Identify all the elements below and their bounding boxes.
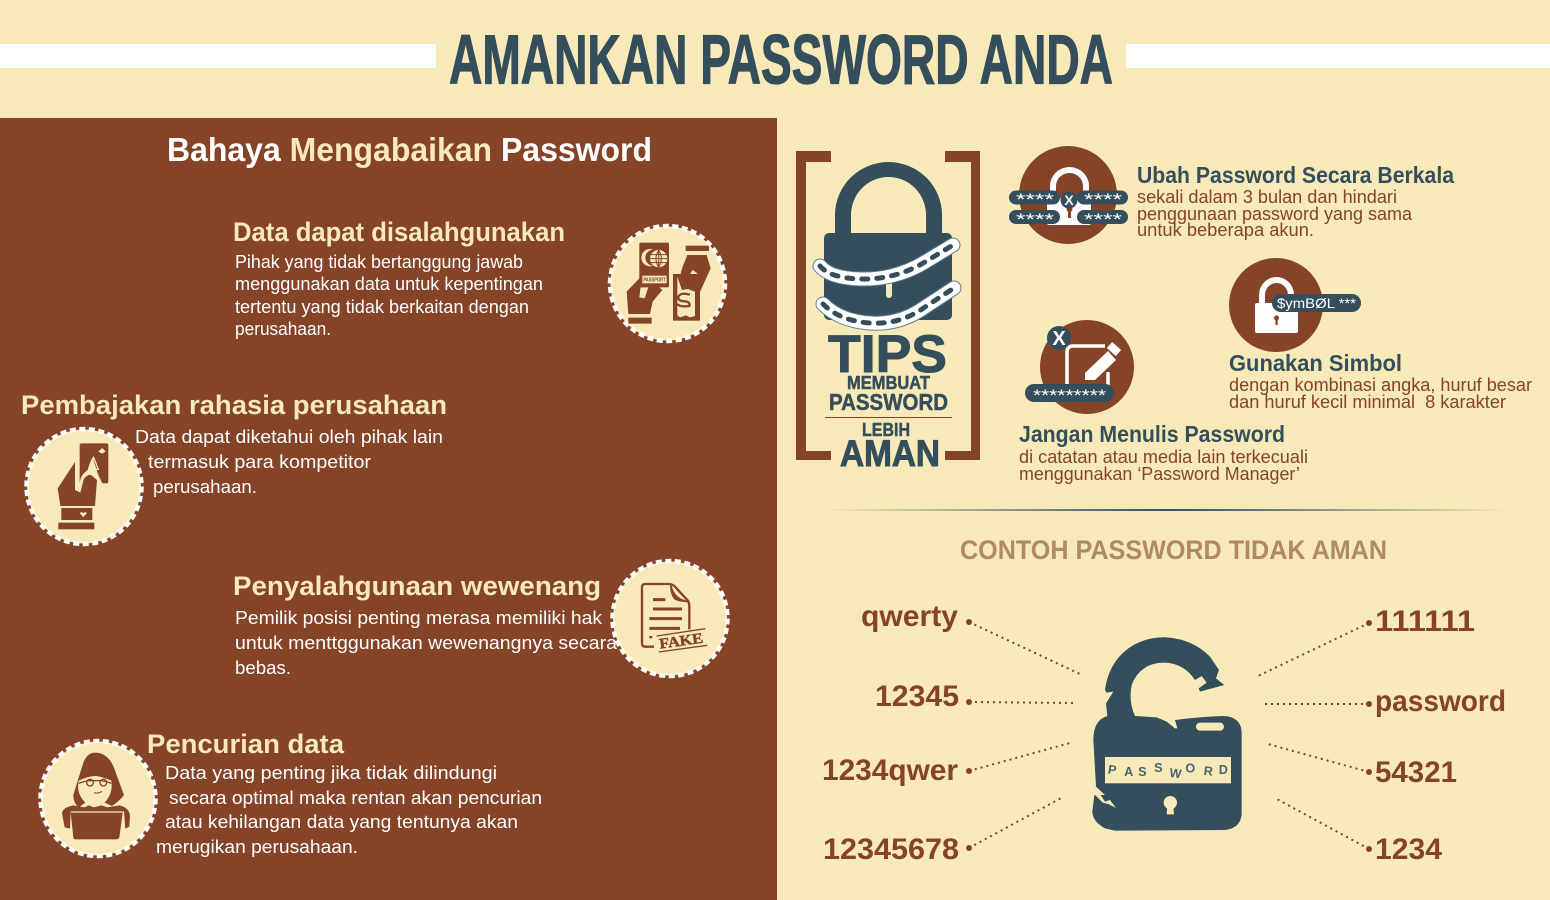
title banner: AMANKAN PASSWORD ANDA [449,20,1113,98]
item: pencurian data: Pencurian data [147,729,344,759]
icon: broken padlock: S [1138,765,1147,779]
icon: broken padlock: D [1219,763,1228,777]
title banner [0,20,1550,98]
label: 1234qwer: 1234qwer [822,754,958,787]
tip: ubah password: untuk beberapa akun. [1137,219,1314,240]
label: 1234 [1275,798,1442,866]
icon: broken padlock [1092,637,1242,831]
tip: gunakan simbol [1229,258,1532,412]
tips heading: AMAN [840,432,940,474]
item: data dapat disalahgunakan: menggunakan data untuk kepentingan [235,273,543,294]
item: penyalahgunaan wewenang: Pemilik posisi penting merasa memiliki hak [235,607,603,628]
icon: broken padlock: A [1124,765,1133,779]
icon: exchanging passport for money [610,226,725,341]
icon: lock with password fields: **** [1084,210,1123,229]
item: pencurian data: atau kehilangan data yang tentunya akan [165,811,518,832]
item: pencurian data [147,729,542,857]
label: 111111 [1258,605,1475,676]
item: data dapat disalahgunakan: perusahaan. [235,318,331,339]
tips heading: PASSWORD [829,389,948,415]
item: data dapat disalahgunakan: Pihak yang tidak bertanggung jawab [235,251,523,272]
label: 12345678 [823,797,1063,866]
tip: ubah password: sekali dalam 3 bulan dan hindari [1137,186,1397,207]
label: 1234qwer [822,743,1070,787]
icon: note and pencil crossed: X [1052,328,1066,350]
tips heading: TIPS [828,325,947,384]
label: 12345678: 12345678 [823,833,959,866]
panel: bahaya mengabaikan password [0,118,777,900]
item: pembajakan rahasia perusahaan: Pembajakan rahasia perusahaan [21,390,447,420]
tips heading: MEMBUAT [847,372,931,393]
tips heading: LEBIH [862,420,910,440]
item: pembajakan rahasia perusahaan: Data dapat diketahui oleh pihak lain [135,426,443,447]
icon: open lock with symbol password: $ymBØL *** [1277,295,1357,311]
icon: chained padlock [820,162,954,323]
icon: hooded hacker with laptop [40,741,156,856]
icon: lock with password fields: **** [1016,190,1055,209]
tip: gunakan simbol: dengan kombinasi angka, huruf besar [1229,374,1532,395]
panel heading: Bahaya Mengabaikan Password [167,131,652,168]
tip: gunakan simbol: Gunakan Simbol [1229,350,1402,376]
brackets [796,151,980,460]
icon: open lock with symbol password [1229,258,1361,352]
item: pencurian data: merugikan perusahaan. [156,836,358,857]
item: pembajakan rahasia perusahaan [21,390,447,497]
label: 54321 [1268,744,1457,789]
item: penyalahgunaan wewenang: bebas. [235,657,291,678]
tip: jangan menulis password: Jangan Menulis Password [1019,421,1285,447]
icon: fake document [612,561,728,676]
icon: fake document: FAKE [658,631,704,653]
tip: jangan menulis password [1019,320,1308,484]
icon: note and pencil crossed: ********* [1033,386,1106,405]
item: pembajakan rahasia perusahaan: termasuk para kompetitor [148,451,371,472]
label: 111111: 111111 [1375,605,1475,638]
icon: broken padlock: O [1185,762,1195,776]
tip: jangan menulis password: menggunakan ‘Password Manager’ [1019,463,1300,484]
icon: hand holding card [26,429,142,544]
item: penyalahgunaan wewenang: untuk menttggunakan wewenangnya secara [235,632,618,653]
label: password: password [1375,685,1506,718]
icon: broken padlock: S [1154,761,1163,775]
item: pencurian data: secara optimal maka rentan akan pencurian [169,787,542,808]
heading: contoh password tidak aman: CONTOH PASSWORD TIDAK AMAN [960,535,1387,565]
tip: ubah password [1009,146,1454,244]
item: data dapat disalahgunakan: tertentu yang tidak berkaitan dengan [235,296,529,317]
icon: broken padlock: P [1107,763,1118,778]
item: pencurian data: Data yang penting jika tidak dilindungi [165,762,497,783]
diagram: unsafe password examples [822,600,1506,866]
label: 54321: 54321 [1375,756,1457,789]
icon: broken padlock: W [1169,766,1182,781]
panel: tips membuat password lebih aman [796,146,1532,484]
tips heading [825,325,952,474]
icon: lock with password fields [1009,146,1128,244]
item: penyalahgunaan wewenang: Penyalahgunaan wewenang [233,571,601,601]
item: data dapat disalahgunakan [233,217,565,339]
item: data dapat disalahgunakan: Data dapat disalahgunakan [233,217,565,247]
label: 12345: 12345 [875,680,959,713]
label: password [1265,685,1506,718]
tip: ubah password: Ubah Password Secara Berkala [1137,162,1454,188]
label: qwerty: qwerty [861,600,958,633]
icon: lock with password fields: **** [1084,190,1123,209]
tip: ubah password: penggunaan password yang sama [1137,203,1413,224]
icon: broken padlock: R [1203,764,1214,779]
label: 1234: 1234 [1375,833,1442,866]
item: penyalahgunaan wewenang [233,571,618,678]
item: pembajakan rahasia perusahaan: perusahaan. [153,476,257,497]
icon: lock with password fields: X [1064,192,1074,208]
icon: lock with password fields: **** [1016,210,1055,229]
icon: note and pencil crossed [1025,320,1134,414]
label: 12345 [875,680,1075,713]
label: qwerty [861,600,1082,675]
icon: exchanging passport for money: PASSPORT [643,277,666,283]
tip: jangan menulis password: di catatan atau media lain terkecuali [1019,446,1308,467]
tip: gunakan simbol: dan huruf kecil minimal 8 karakter [1229,391,1506,412]
